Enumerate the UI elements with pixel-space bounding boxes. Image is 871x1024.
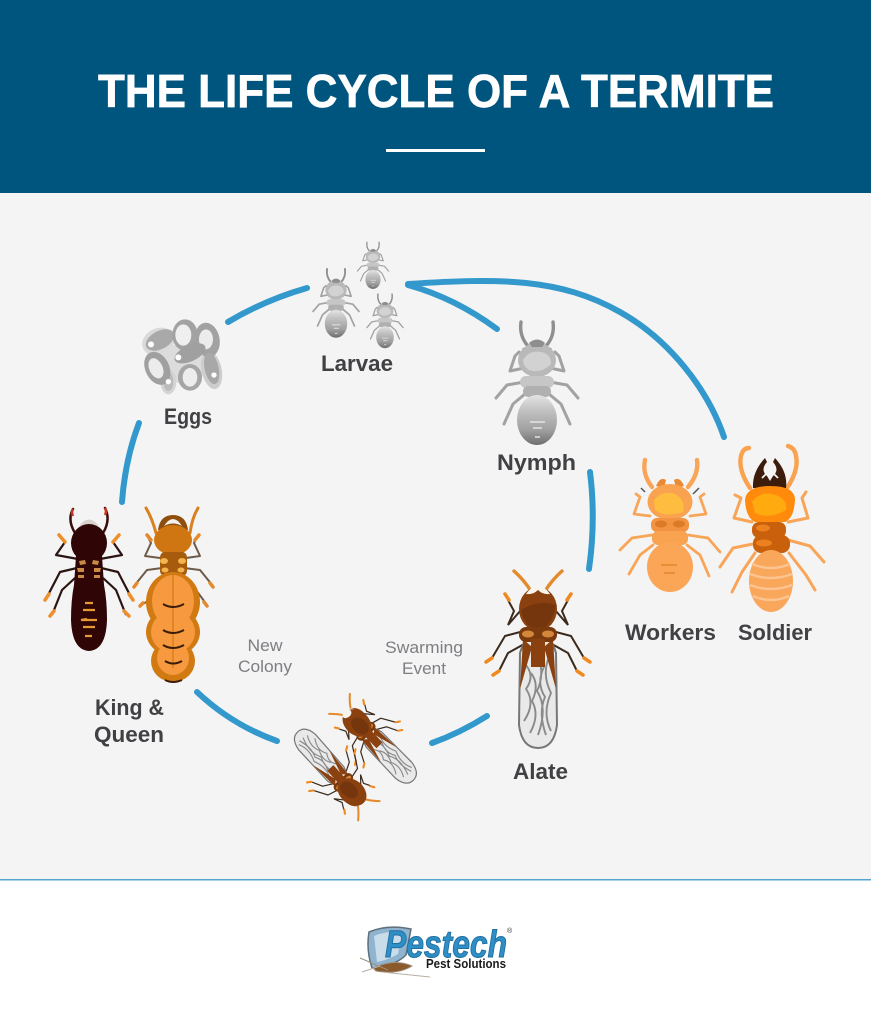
- panel: life cycle: [0, 193, 871, 879]
- label: new colony: New: [248, 636, 283, 655]
- title underline: [386, 149, 485, 152]
- header band: [0, 0, 871, 193]
- logo: Pestech: [360, 924, 513, 977]
- label: eggs: Eggs: [164, 404, 212, 429]
- label: king and queen: King &: [95, 695, 164, 720]
- logo: Pestech: Pest Solutions: [426, 956, 506, 971]
- logo: Pestech: ®: [507, 927, 513, 935]
- text: Event: [402, 659, 446, 678]
- cycle arrows: [122, 281, 724, 743]
- label: workers: Workers: [625, 620, 716, 645]
- label: larvae: Larvae: [321, 351, 393, 376]
- logo: Pestech: Pestech: [385, 924, 507, 966]
- icon: alate termite: [486, 571, 590, 748]
- icon: swarming pair: [275, 682, 436, 832]
- icon: eggs: [138, 319, 225, 394]
- icon: worker termite: [620, 460, 720, 592]
- label: soldier: Soldier: [738, 620, 812, 645]
- label: alate: Alate: [513, 759, 568, 784]
- icon: queen termite: [134, 508, 213, 682]
- icon: king termite: [45, 508, 133, 651]
- text: Queen: [94, 722, 164, 747]
- title: THE LIFE CYCLE OF A TERMITE: [98, 65, 774, 117]
- text: Colony: [238, 657, 293, 676]
- footer divider: [0, 879, 871, 880]
- icon: soldier termite: [720, 446, 824, 612]
- label: nymph: Nymph: [497, 450, 576, 475]
- icon: nymph: [496, 322, 578, 445]
- label: swarming event: Swarming: [385, 638, 463, 657]
- icon: larvae: [313, 242, 403, 348]
